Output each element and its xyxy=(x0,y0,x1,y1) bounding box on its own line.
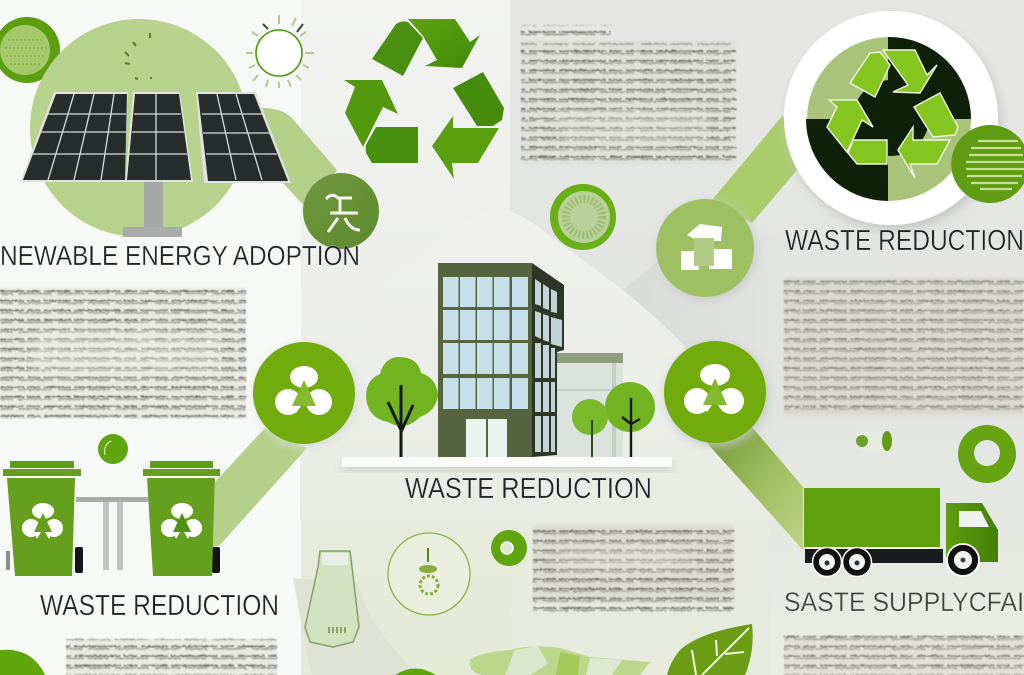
icon: left bin xyxy=(3,461,83,576)
tower side xyxy=(532,263,564,457)
heading: waste reduction centre: WASTE REDUCTION xyxy=(405,473,652,505)
icon: recycle badge right xyxy=(664,341,768,446)
icon: capsule xyxy=(856,431,892,451)
icon: small bottom disc xyxy=(395,668,436,675)
white disc xyxy=(784,11,1001,230)
icon: bright recycle symbol xyxy=(827,50,958,178)
heading: waste reduction left: WASTE REDUCTION xyxy=(40,590,279,622)
icon: sun xyxy=(246,15,314,88)
icon: leaf xyxy=(667,624,753,675)
ground slab xyxy=(342,457,672,471)
text block: bottom left xyxy=(66,639,277,675)
panel: recycling badge xyxy=(656,11,1024,300)
large light green circle xyxy=(30,19,248,237)
icon: truck xyxy=(804,488,998,576)
icon: corner disc xyxy=(0,650,45,675)
icon: striped disc xyxy=(951,125,1024,203)
annex xyxy=(555,353,623,457)
icon: small disc xyxy=(98,434,128,464)
icon: right bin xyxy=(143,461,220,576)
tower front xyxy=(438,263,532,457)
icon: outlined circle xyxy=(388,533,470,615)
icon: energy badge xyxy=(303,173,379,249)
text block: bottom centre xyxy=(533,525,734,612)
text block: bottom right xyxy=(784,635,1024,675)
text block: right xyxy=(784,277,1024,415)
stand xyxy=(76,497,148,570)
panel: supply chain xyxy=(784,425,1024,617)
panel: recycling bins xyxy=(3,434,279,622)
icon: solar panel xyxy=(20,92,291,237)
icon: recycle badge left xyxy=(213,342,357,547)
icon: world map xyxy=(470,646,650,675)
connector band to energy badge xyxy=(262,108,337,207)
two-tone disc xyxy=(806,37,971,201)
text block: left xyxy=(0,288,246,418)
icon: large recycle symbol xyxy=(344,19,504,179)
tree: right pair xyxy=(572,382,655,457)
icon: green ring xyxy=(958,425,1016,483)
icon: reuse badge xyxy=(656,199,756,300)
connector band xyxy=(712,115,797,223)
panel: green building xyxy=(342,263,672,505)
icon: textured disc xyxy=(550,184,616,250)
text block: top centre xyxy=(521,25,736,165)
tree: left xyxy=(366,357,438,457)
heading: renewable energy adoption: NEWABLE ENERGY ADOPTION xyxy=(0,240,360,271)
panel: renewable energy xyxy=(0,15,379,271)
icon: top-left textured disc xyxy=(0,17,60,83)
icon: small green disc xyxy=(491,530,527,566)
icon: bottle xyxy=(305,551,359,647)
icon: sprout spark marks xyxy=(125,33,152,79)
connector band to truck xyxy=(707,427,803,550)
